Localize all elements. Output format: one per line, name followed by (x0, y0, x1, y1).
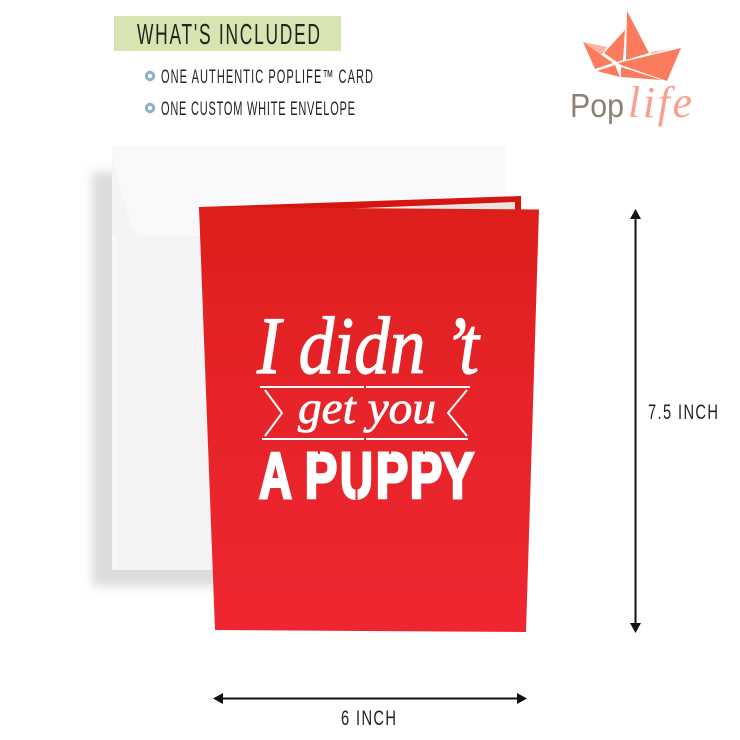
envelope flap (112, 146, 506, 236)
envelope (92, 146, 506, 586)
icon: origami boat (583, 11, 681, 81)
card front (199, 207, 539, 632)
stencil headline: U (340, 439, 373, 512)
card back panel (199, 196, 521, 212)
wordmark (570, 78, 692, 127)
greeting card (199, 196, 539, 632)
banner (260, 387, 470, 439)
stencil headline: A (259, 439, 292, 512)
logo: poplife (570, 11, 692, 127)
heading: what's included: WHAT'S INCLUDED (137, 19, 320, 51)
stencil headline: P (410, 440, 442, 513)
wordmark: Pop (570, 87, 624, 124)
arrow: height dimension (630, 209, 641, 633)
stencil headline: P (376, 440, 408, 513)
stencil headline: P (305, 440, 337, 513)
bullet item: envelope: ONE CUSTOM WHITE ENVELOPE (161, 99, 355, 120)
label: width: 6 INCH (341, 706, 396, 730)
arrow: width dimension (213, 693, 527, 704)
card message (256, 300, 481, 513)
card message: get you (298, 382, 436, 433)
stencil headline: Y (441, 441, 474, 513)
wordmark: life (628, 78, 692, 127)
stencil headline (259, 439, 474, 513)
included items list (146, 67, 373, 120)
bullet item: card: ONE AUTHENTIC POPLIFE™ CARD (161, 67, 373, 88)
envelope shadow (92, 172, 222, 586)
card message: I didn ’t (256, 300, 481, 391)
label: height: 7.5 INCH (648, 400, 718, 424)
